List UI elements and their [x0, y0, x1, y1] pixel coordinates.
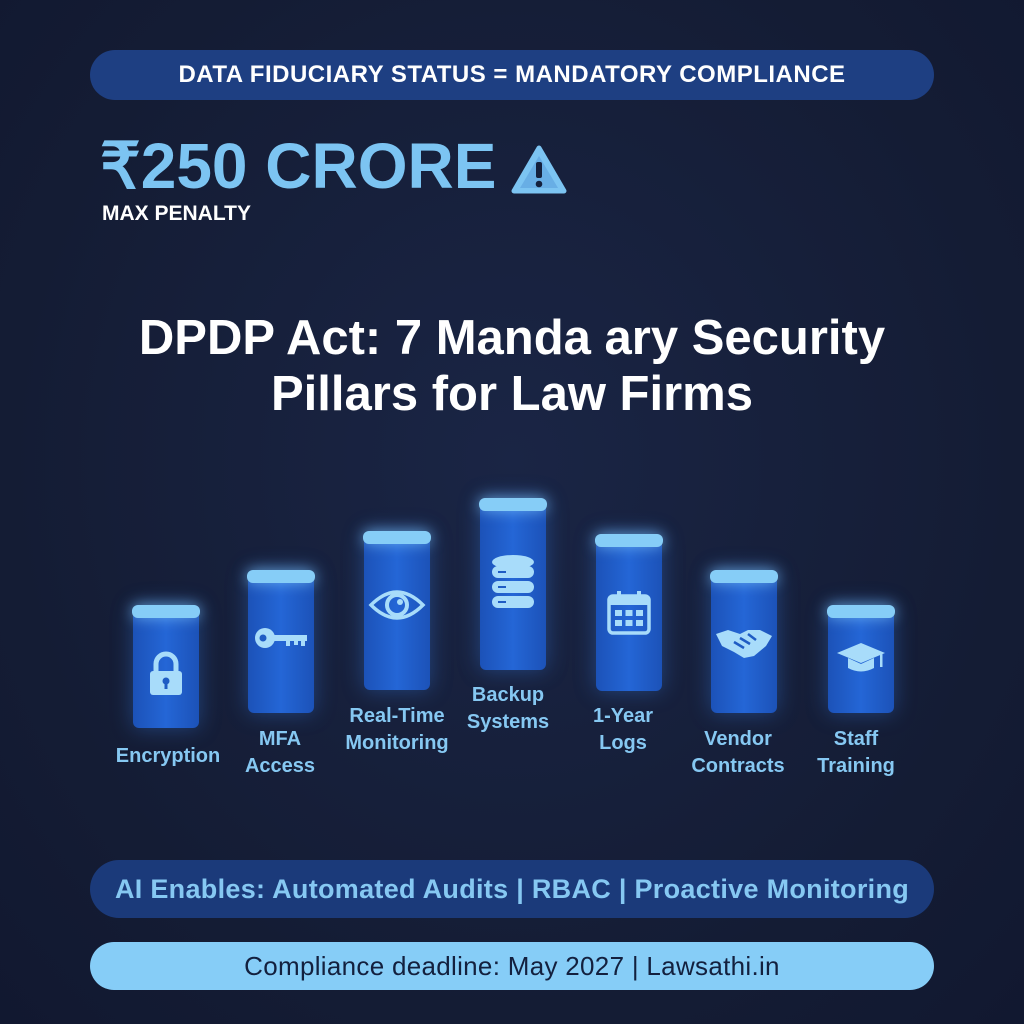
penalty figure — [100, 130, 566, 225]
pillar: staff training: Training — [817, 755, 895, 777]
title: DPDP Act: 7 Manda ary Security — [139, 311, 885, 365]
top banner — [90, 50, 934, 100]
pillar: real-time monitoring: Real-Time — [349, 705, 445, 727]
title — [139, 311, 885, 421]
title: Pillars for Law Firms — [271, 367, 753, 421]
pillar: vendor contracts: Vendor — [704, 728, 772, 750]
pillar: MFA — [236, 557, 326, 777]
penalty amount: ₹250 CRORE — [100, 130, 496, 202]
pillar: encryption: Encryption — [116, 745, 220, 767]
pillar: 1-year logs: 1-Year — [593, 705, 653, 727]
pillar: encryption — [116, 592, 220, 767]
pillar: staff training: Staff — [834, 728, 878, 750]
top banner: DATA FIDUCIARY STATUS = MANDATORY COMPLIANCE — [178, 61, 846, 88]
pillar: MFA: MFA — [259, 728, 301, 750]
AI enables bar — [90, 860, 934, 918]
max penalty label: MAX PENALTY — [102, 202, 251, 225]
pillar: backup systems: Systems — [467, 711, 549, 733]
pillar: backup systems — [467, 485, 558, 733]
pillar: vendor contracts: Contracts — [691, 755, 785, 777]
pillar: MFA: Access — [245, 755, 315, 777]
pillar: 1-year logs — [584, 521, 674, 754]
pillar: 1-year logs: Logs — [599, 732, 647, 754]
AI enables bar: AI Enables: Automated Audits | RBAC | Proactive Monitoring — [115, 874, 909, 904]
pillar: staff training — [816, 592, 906, 777]
icon: warning — [512, 146, 566, 194]
pillar: real-time monitoring: Monitoring — [345, 732, 449, 754]
pillar: backup systems: Backup — [472, 684, 544, 706]
footer deadline: Compliance deadline: May 2027 | Lawsathi.in — [244, 950, 780, 980]
pillar: real-time monitoring — [345, 518, 449, 754]
pillar: vendor contracts — [691, 557, 789, 777]
footer deadline — [90, 942, 934, 990]
pillars chart — [116, 485, 906, 777]
